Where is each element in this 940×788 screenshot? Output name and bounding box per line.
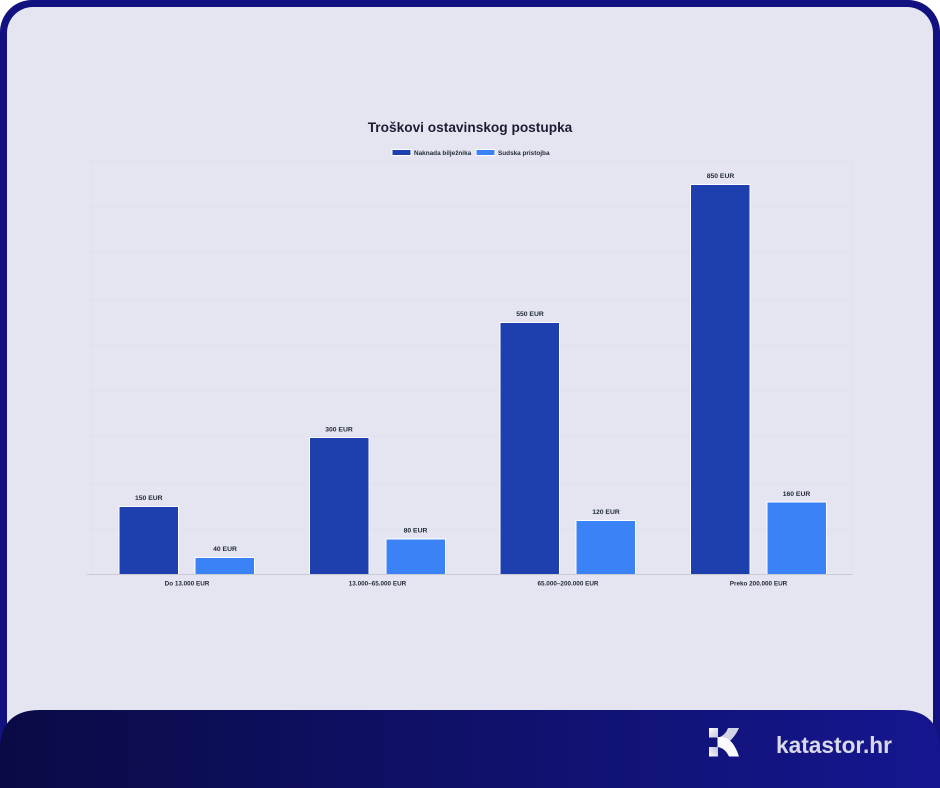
group: 13.000–65.000 EUR bbox=[310, 426, 446, 588]
group: 65.000–200.000 EUR bbox=[500, 311, 636, 588]
brand name: katastor.hr bbox=[776, 732, 892, 758]
bar chart bbox=[87, 173, 853, 588]
group: Preko 200.000 EUR bbox=[690, 173, 826, 588]
group: Do 13.000 EUR: 150 EUR bbox=[135, 495, 163, 502]
legend: court fee: Sudska pristojba bbox=[498, 150, 550, 157]
footer band bbox=[0, 710, 940, 788]
legend: notary fee bbox=[392, 150, 472, 157]
title: Troškovi ostavinskog postupka bbox=[368, 120, 573, 135]
group: Do 13.000 EUR bbox=[119, 495, 254, 588]
group: Preko 200.000 EUR: 160 EUR bbox=[783, 491, 810, 498]
group: Do 13.000 EUR: Do 13.000 EUR bbox=[165, 580, 210, 588]
legend bbox=[392, 150, 550, 157]
group: Preko 200.000 EUR: Preko 200.000 EUR bbox=[730, 580, 788, 588]
group: 13.000–65.000 EUR: 13.000–65.000 EUR bbox=[349, 580, 407, 588]
group: 65.000–200.000 EUR: 550 EUR bbox=[516, 311, 544, 318]
legend: court fee bbox=[476, 150, 550, 157]
group: Do 13.000 EUR: 40 EUR bbox=[213, 546, 237, 553]
group: 65.000–200.000 EUR: 120 EUR bbox=[592, 509, 620, 516]
group: Preko 200.000 EUR: 850 EUR bbox=[707, 173, 734, 180]
icon: katastor logo bbox=[709, 728, 739, 756]
group: 13.000–65.000 EUR: 80 EUR bbox=[404, 528, 427, 534]
x axis bbox=[87, 574, 853, 576]
group: 13.000–65.000 EUR: 300 EUR bbox=[325, 426, 353, 434]
legend: notary fee: Naknada bilježnika bbox=[414, 150, 472, 157]
gridlines bbox=[87, 161, 852, 575]
group: 65.000–200.000 EUR: 65.000–200.000 EUR bbox=[537, 580, 599, 588]
